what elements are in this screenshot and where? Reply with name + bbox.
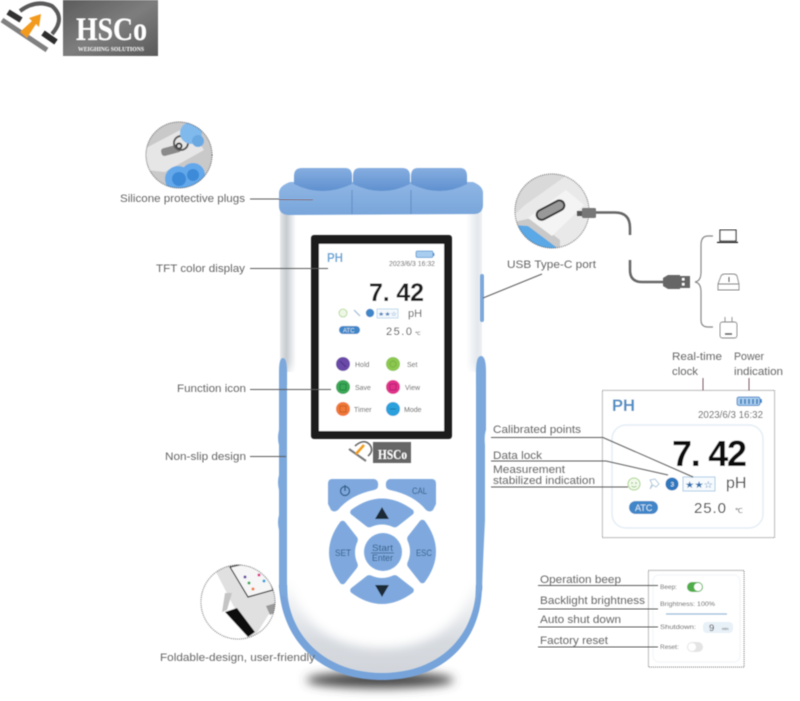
callout: operation beep (538, 574, 658, 586)
callout: function icon: Function icon (177, 383, 246, 395)
logo plate: HSCo (76, 12, 147, 48)
callout: measurement stabilized indication: stabilized indication (493, 475, 595, 487)
detail circle: USB Type-C port (514, 173, 590, 250)
callout: data lock: Data lock (493, 450, 543, 462)
small device logo (349, 442, 411, 463)
date and time: 2023/6/3 16:32 (698, 410, 763, 421)
silicone cap and plugs (279, 168, 483, 215)
callout: auto shut down: Auto shut down (540, 614, 621, 626)
callout: calibrated points: Calibrated points (493, 424, 582, 436)
CAL key: CAL (412, 486, 427, 496)
label: real-time clock: clock (672, 366, 699, 378)
callout: data lock (491, 450, 668, 475)
callout: measurement stabilized indication (491, 464, 628, 487)
label: power indication: indication (734, 366, 783, 378)
callout: factory reset (538, 635, 658, 647)
label: power indication: Power (734, 351, 764, 363)
USB cable (577, 208, 690, 289)
ATC badge (629, 501, 658, 514)
panel: display detail (602, 390, 774, 538)
icon: data lock badge (666, 478, 678, 490)
start enter key (364, 533, 402, 571)
callout: calibrated points (491, 424, 693, 477)
display screen: ★★☆ (378, 311, 397, 318)
display screen: PH (327, 250, 343, 265)
connection brace (695, 236, 713, 327)
shutdown setting: 9 (709, 623, 714, 634)
device bottom rim (279, 585, 482, 680)
logo plate (63, 0, 158, 56)
display screen: pH (408, 308, 422, 320)
callout: auto shut down (538, 614, 658, 627)
display screen: View (405, 385, 421, 392)
SET key: SET (335, 548, 351, 558)
ATC badge: ATC (635, 503, 653, 513)
display screen: Set (407, 362, 418, 369)
display screen: Timer (354, 407, 372, 414)
ESC key: ESC (416, 548, 432, 558)
start enter key: Enter (372, 553, 393, 563)
PH heading: PH (612, 396, 635, 415)
display screen: ATC (343, 328, 355, 334)
icon: smiley (628, 478, 640, 490)
calibrated stars (683, 477, 715, 491)
callout: backlight brightness: Backlight brightness (540, 595, 646, 607)
calibrated stars: ★★☆ (685, 480, 713, 491)
callout: silicone plug pointer (279, 198, 313, 201)
callout: measurement stabilized indication: Measurement (493, 464, 565, 476)
panel: settings detail (648, 570, 744, 667)
logo: HSCo (2, 0, 158, 56)
display screen: 2023/6/3 16:32 (389, 261, 435, 268)
pH reading: 7. 42 (672, 433, 747, 474)
callout: non-slip design (165, 451, 286, 463)
callout: non-slip design: Non-slip design (165, 451, 246, 463)
device upper body (280, 205, 482, 385)
label: real-time clock: Real-time (672, 351, 722, 363)
display screen: Hold (355, 362, 370, 369)
device lower body (287, 368, 476, 673)
brightness setting: Brightness: 100% (660, 601, 715, 608)
shutdown setting (660, 622, 733, 634)
icon: power bank (718, 274, 739, 290)
shutdown setting: Shutdown: (660, 624, 696, 631)
down key (350, 575, 414, 604)
temperature: 25.0 (694, 500, 726, 517)
label: foldable design: Foldable-design, user-friendly (160, 652, 316, 664)
callout: operation beep: Operation beep (540, 574, 621, 586)
reset setting: Reset: (660, 644, 679, 651)
shutdown setting: min (722, 626, 728, 631)
pH unit: pH (726, 475, 746, 492)
icon: logo loop and arrow (2, 3, 59, 50)
display screen: 25.0 (386, 326, 412, 338)
callout: TFT color display: TFT color display (156, 263, 246, 275)
label: silicone protective plugs: Silicone protective plugs (120, 193, 246, 205)
device rubber grips (278, 356, 486, 596)
detail circle: silicone plugs (145, 120, 215, 192)
icon: data lock badge: 3 (670, 482, 674, 488)
display screen: Save (355, 385, 371, 392)
detail circle: foldable design (200, 560, 276, 640)
label: power indication (734, 351, 783, 397)
panel: display detail: ℃ (735, 508, 743, 515)
up key (350, 498, 414, 527)
device shadow (306, 672, 454, 688)
small device logo: HSCo (378, 448, 407, 463)
display screen: ℃ (415, 331, 421, 337)
callout: USB Type-C port: USB Type-C port (507, 259, 596, 271)
icon: wall charger (720, 317, 737, 338)
start enter key: Start (372, 543, 394, 553)
callout: USB Type-C port (483, 259, 596, 298)
icon: laptop (717, 230, 738, 242)
callout: factory reset: Factory reset (540, 635, 608, 647)
display screen: Mode (404, 407, 422, 414)
device: handheld pH meter (278, 168, 486, 688)
beep setting: Beep: (660, 584, 677, 591)
power key (328, 479, 378, 512)
icon: battery (737, 397, 762, 406)
logo plate: WEIGHING SOLUTIONS (78, 47, 145, 53)
icon: pin (650, 479, 659, 489)
display screen (311, 235, 452, 439)
USB port flap (480, 274, 484, 322)
label: real-time clock (672, 351, 722, 411)
keypad (328, 479, 436, 604)
display screen: 7. 42 (369, 279, 424, 307)
